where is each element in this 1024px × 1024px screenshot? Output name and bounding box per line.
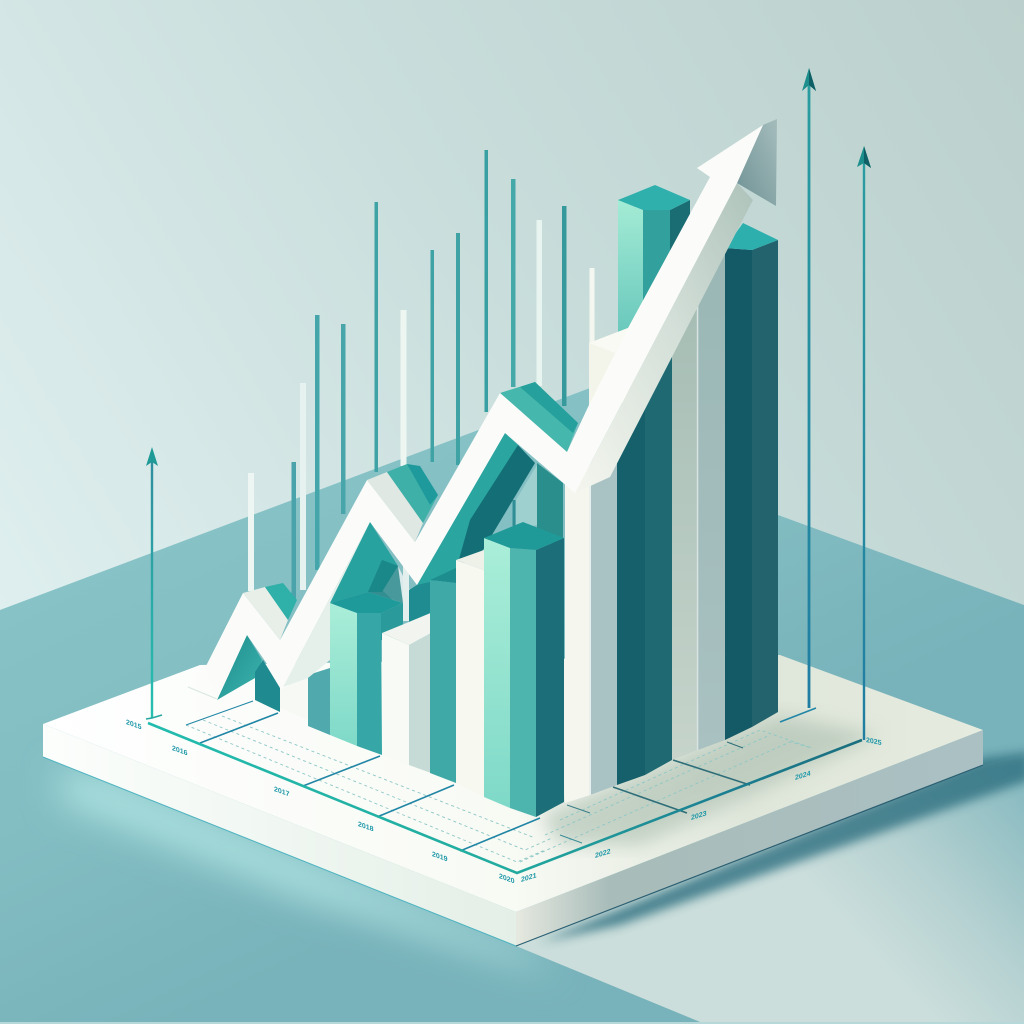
axis labels: 2015: [126, 717, 142, 731]
small teal bar: [308, 668, 330, 735]
ribbon underside: second valley: [283, 522, 430, 687]
white block under arrow: [589, 328, 628, 420]
arrow: second right vertical: [857, 146, 871, 740]
ribbon peak faces: [243, 382, 578, 640]
ribbon start shadow on platform: [188, 687, 217, 699]
bar C: [382, 613, 431, 773]
shadow on platform: [540, 715, 880, 845]
axis labels: [126, 717, 882, 885]
background poles: [248, 150, 594, 602]
small dark bar: [255, 660, 280, 712]
axis labels: 2021: [521, 871, 537, 884]
lighter floor area at lower right: [516, 755, 1024, 1024]
axis labels: 2019: [432, 849, 448, 863]
axis labels: 2016: [172, 743, 188, 757]
axis labels: 2017: [274, 784, 290, 798]
lower left floor glow: [60, 770, 560, 975]
x axis ticks: [186, 701, 816, 851]
bottom edge strip: [0, 1022, 1024, 1024]
teal strip behind peak three: [537, 463, 563, 545]
bar B: [330, 592, 403, 755]
bar D: [430, 568, 456, 783]
ribbon underside: third valley: [417, 433, 535, 585]
white bar: [565, 440, 617, 803]
main axis line: [148, 723, 862, 873]
arrow: left vertical: [146, 447, 162, 719]
axis labels: 2018: [358, 819, 374, 833]
shaft side face: [575, 183, 753, 493]
ribbon underside: first valley: [217, 635, 262, 700]
pale strip behind peak three: [516, 465, 537, 530]
axis labels: 2023: [691, 809, 707, 822]
axis labels: 2025: [866, 737, 882, 747]
floor: [0, 388, 1024, 1024]
bar E: [456, 550, 484, 797]
platform cast shadow: [540, 752, 1024, 942]
rear dark bar: [725, 223, 778, 740]
rear teal bar: [617, 330, 672, 785]
axis labels: 2024: [795, 769, 811, 782]
grid: dashed lines: [186, 716, 812, 862]
arrow: tall right vertical: [802, 68, 816, 708]
axis labels: 2022: [595, 847, 611, 860]
rear pale bar: [672, 250, 725, 760]
rising ribbon arrow: [205, 125, 763, 700]
bar F: [484, 522, 564, 817]
tall bar behind arrow: [618, 185, 690, 340]
platform: [43, 655, 983, 946]
axis labels: 2020: [499, 871, 515, 885]
small white bar: [280, 675, 308, 720]
arrowhead dark face: [737, 119, 777, 206]
